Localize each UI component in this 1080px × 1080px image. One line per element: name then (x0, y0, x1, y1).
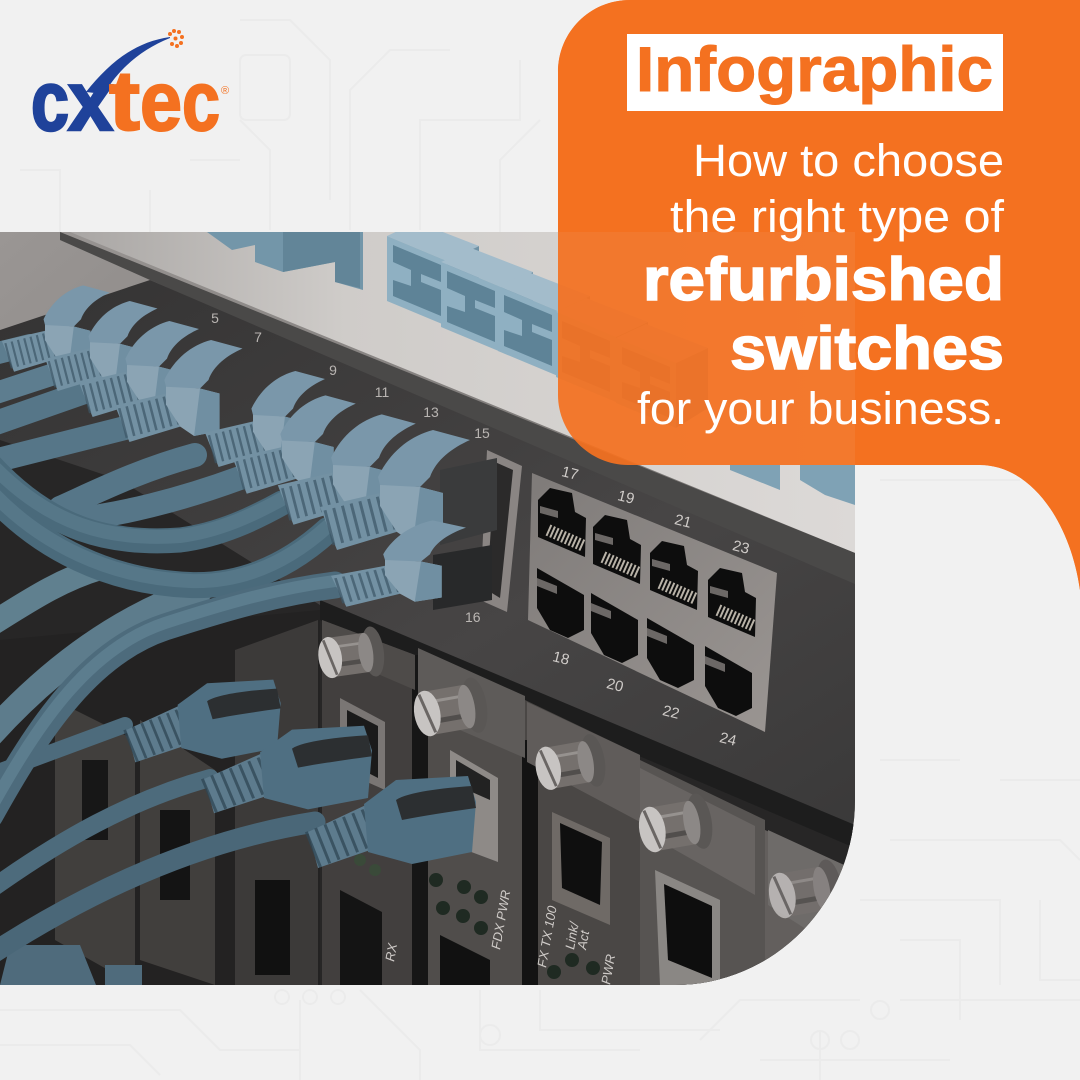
front connectors group (205, 371, 497, 610)
module text labels: FDX PWR (488, 889, 513, 951)
logo wordmark tec: t (109, 54, 140, 148)
logo wordmark cx: c (31, 54, 69, 148)
back wall of rack (0, 232, 855, 985)
light front plate (70, 232, 855, 553)
port numbers around block: 20 (605, 675, 625, 696)
registered mark: ® (221, 85, 229, 97)
RJ45 ports, top row (538, 488, 756, 637)
main switch face (0, 280, 855, 835)
diagonal bar between switch and modules (320, 600, 855, 848)
lower rack dark area (0, 400, 855, 985)
port numbers on upper row: 13 (423, 404, 439, 420)
port block plate (528, 473, 777, 732)
upper port column frame (480, 450, 522, 612)
logo wordmark tec (109, 54, 220, 148)
port numbers around block: 22 (661, 702, 681, 723)
port numbers around block (551, 463, 751, 750)
logo wordmark cx (31, 54, 113, 148)
patch cables back layer (0, 345, 315, 955)
module text labels (382, 889, 618, 986)
solid right part of orange panel (855, 0, 1080, 590)
ports on modules (340, 698, 720, 985)
port numbers on upper row: 15 (474, 425, 490, 441)
port numbers on upper row: 11 (375, 384, 389, 400)
module text labels: Link/ (562, 920, 582, 951)
module text labels: FX TX 100 (534, 904, 560, 969)
modules (322, 620, 855, 985)
logo: cxtec (31, 29, 229, 148)
headline: the right type of (670, 191, 1005, 242)
headline: for your business. (637, 383, 1004, 434)
port numbers around block: 17 (560, 463, 580, 484)
logo dots (168, 29, 184, 48)
lower connectors (126, 680, 476, 868)
module text labels: RX (382, 941, 400, 963)
RJ45 ports, bottom row (537, 568, 752, 716)
metal rail (60, 232, 855, 590)
port numbers around block: 21 (673, 511, 693, 532)
module text labels: Act (574, 928, 592, 952)
module text labels: PWR (598, 953, 618, 986)
port numbers around block: 19 (616, 487, 636, 508)
port numbers on upper row (211, 310, 490, 441)
port 16 label: 16 (465, 609, 481, 625)
logo wordmark tec: e (140, 54, 182, 148)
photo: network switch with patch cables (0, 222, 855, 986)
logo swoosh (86, 37, 170, 94)
orange title panel (558, 0, 1080, 590)
front sweeping cables (0, 463, 335, 815)
infographic label box: Infographic (636, 35, 993, 105)
logo wordmark tec: c (182, 54, 220, 148)
upper connectors group (2, 285, 242, 442)
blue fibre connectors (207, 222, 855, 505)
headline: switches (730, 315, 1004, 382)
logo wordmark cx: x (68, 54, 113, 148)
port numbers on upper row: 5 (211, 310, 219, 326)
solid upper part of orange panel (558, 0, 855, 232)
left small modules (0, 610, 320, 985)
port numbers around block: 23 (731, 537, 751, 558)
thumb screws (315, 625, 846, 925)
port numbers on upper row: 9 (329, 362, 337, 378)
port numbers around block: 24 (718, 729, 738, 750)
headline: refurbished (643, 246, 1004, 313)
port numbers around block: 18 (551, 648, 571, 669)
headline (637, 135, 1005, 434)
port numbers on upper row: 7 (254, 329, 262, 345)
status LEDs (354, 854, 600, 979)
headline: How to choose (693, 135, 1004, 186)
